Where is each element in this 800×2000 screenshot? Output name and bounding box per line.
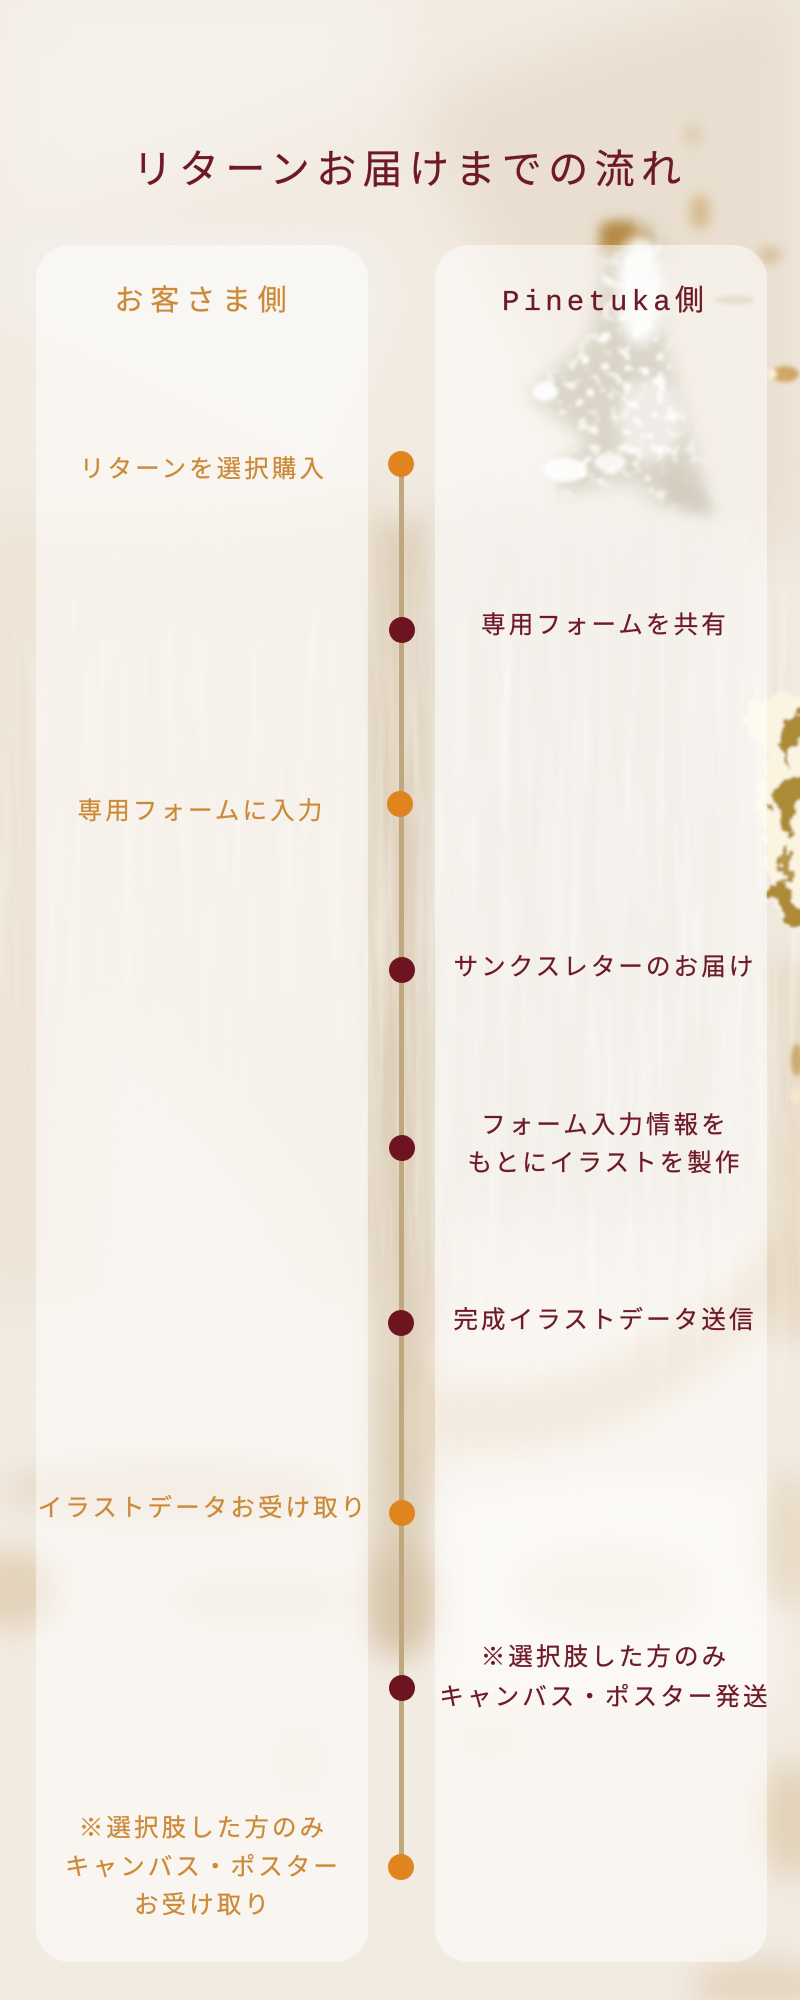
customer step: fill in form: 専用フォームに入力 bbox=[78, 798, 325, 825]
step dot 9 bbox=[388, 1854, 414, 1880]
brush streaks bbox=[360, 480, 800, 1480]
title: リターンお届けまでの流れ bbox=[133, 148, 687, 192]
step dot 6 bbox=[388, 1310, 414, 1336]
customer step: receive canvas or poster: キャンバス・ポスター bbox=[65, 1854, 341, 1880]
Pinetuka step: create illustration: もとにイラストを製作 bbox=[467, 1150, 743, 1177]
step dot 8 bbox=[389, 1675, 415, 1701]
gold leaf, right edge bbox=[745, 692, 800, 935]
customer step: select return and purchase: リターンを選択購入 bbox=[80, 456, 327, 483]
step dot 7 bbox=[389, 1500, 415, 1526]
Pinetuka step: ship canvas or poster: キャンバス・ポスター発送 bbox=[439, 1684, 771, 1711]
Pinetuka step: send completed data: 完成イラストデータ送信 bbox=[453, 1307, 757, 1334]
step dot 2 bbox=[389, 617, 415, 643]
step dot 1 bbox=[388, 451, 414, 477]
Pinetuka step: ship canvas or poster bbox=[439, 1644, 771, 1711]
step dot 4 bbox=[389, 957, 415, 983]
Pinetuka step: thank-you letter: サンクスレターのお届け bbox=[454, 954, 756, 981]
blurred lower wash bbox=[0, 1460, 800, 2000]
customer step: receive canvas or poster: ※選択肢した方のみ bbox=[79, 1815, 327, 1842]
customer step: receive canvas or poster: お受け取り bbox=[134, 1892, 272, 1919]
timeline line bbox=[399, 464, 404, 1867]
customer step: receive illustration data: イラストデータお受け取り bbox=[38, 1495, 368, 1522]
customer step: receive canvas or poster bbox=[65, 1815, 341, 1919]
gold flecks, right edge bbox=[790, 1044, 800, 1103]
warm diagonal band, right panel bbox=[420, 1220, 790, 1452]
Pinetuka step: create illustration: フォーム入力情報を bbox=[481, 1112, 729, 1139]
step dot 5 bbox=[389, 1135, 415, 1161]
Pinetuka step: ship canvas or poster: ※選択肢した方のみ bbox=[481, 1644, 729, 1671]
panel: customer side bbox=[36, 245, 368, 1962]
heading: customer side: お客さま側 bbox=[114, 285, 294, 317]
step dot 3 bbox=[387, 791, 413, 817]
gold star, top right bbox=[525, 123, 799, 515]
Pinetuka step: create illustration bbox=[467, 1112, 743, 1177]
tonal washes bbox=[420, 0, 800, 560]
panel: Pinetuka side bbox=[435, 245, 767, 1962]
heading: Pinetuka side: Pinetuka側 bbox=[502, 285, 708, 319]
Pinetuka step: share dedicated form: 専用フォームを共有 bbox=[481, 612, 729, 639]
